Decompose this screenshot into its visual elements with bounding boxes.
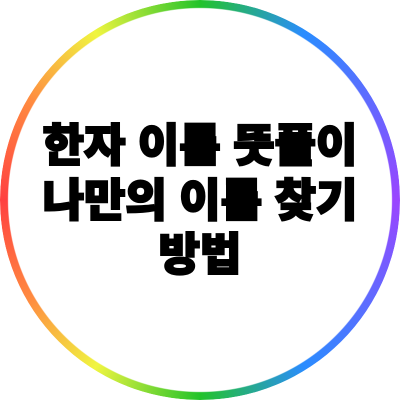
title line 3: 방법 (159, 229, 241, 280)
title line 2: 나만의 이름 찾기 (43, 175, 357, 226)
title line 1: 한자 이름 뜻풀이 (43, 120, 357, 171)
